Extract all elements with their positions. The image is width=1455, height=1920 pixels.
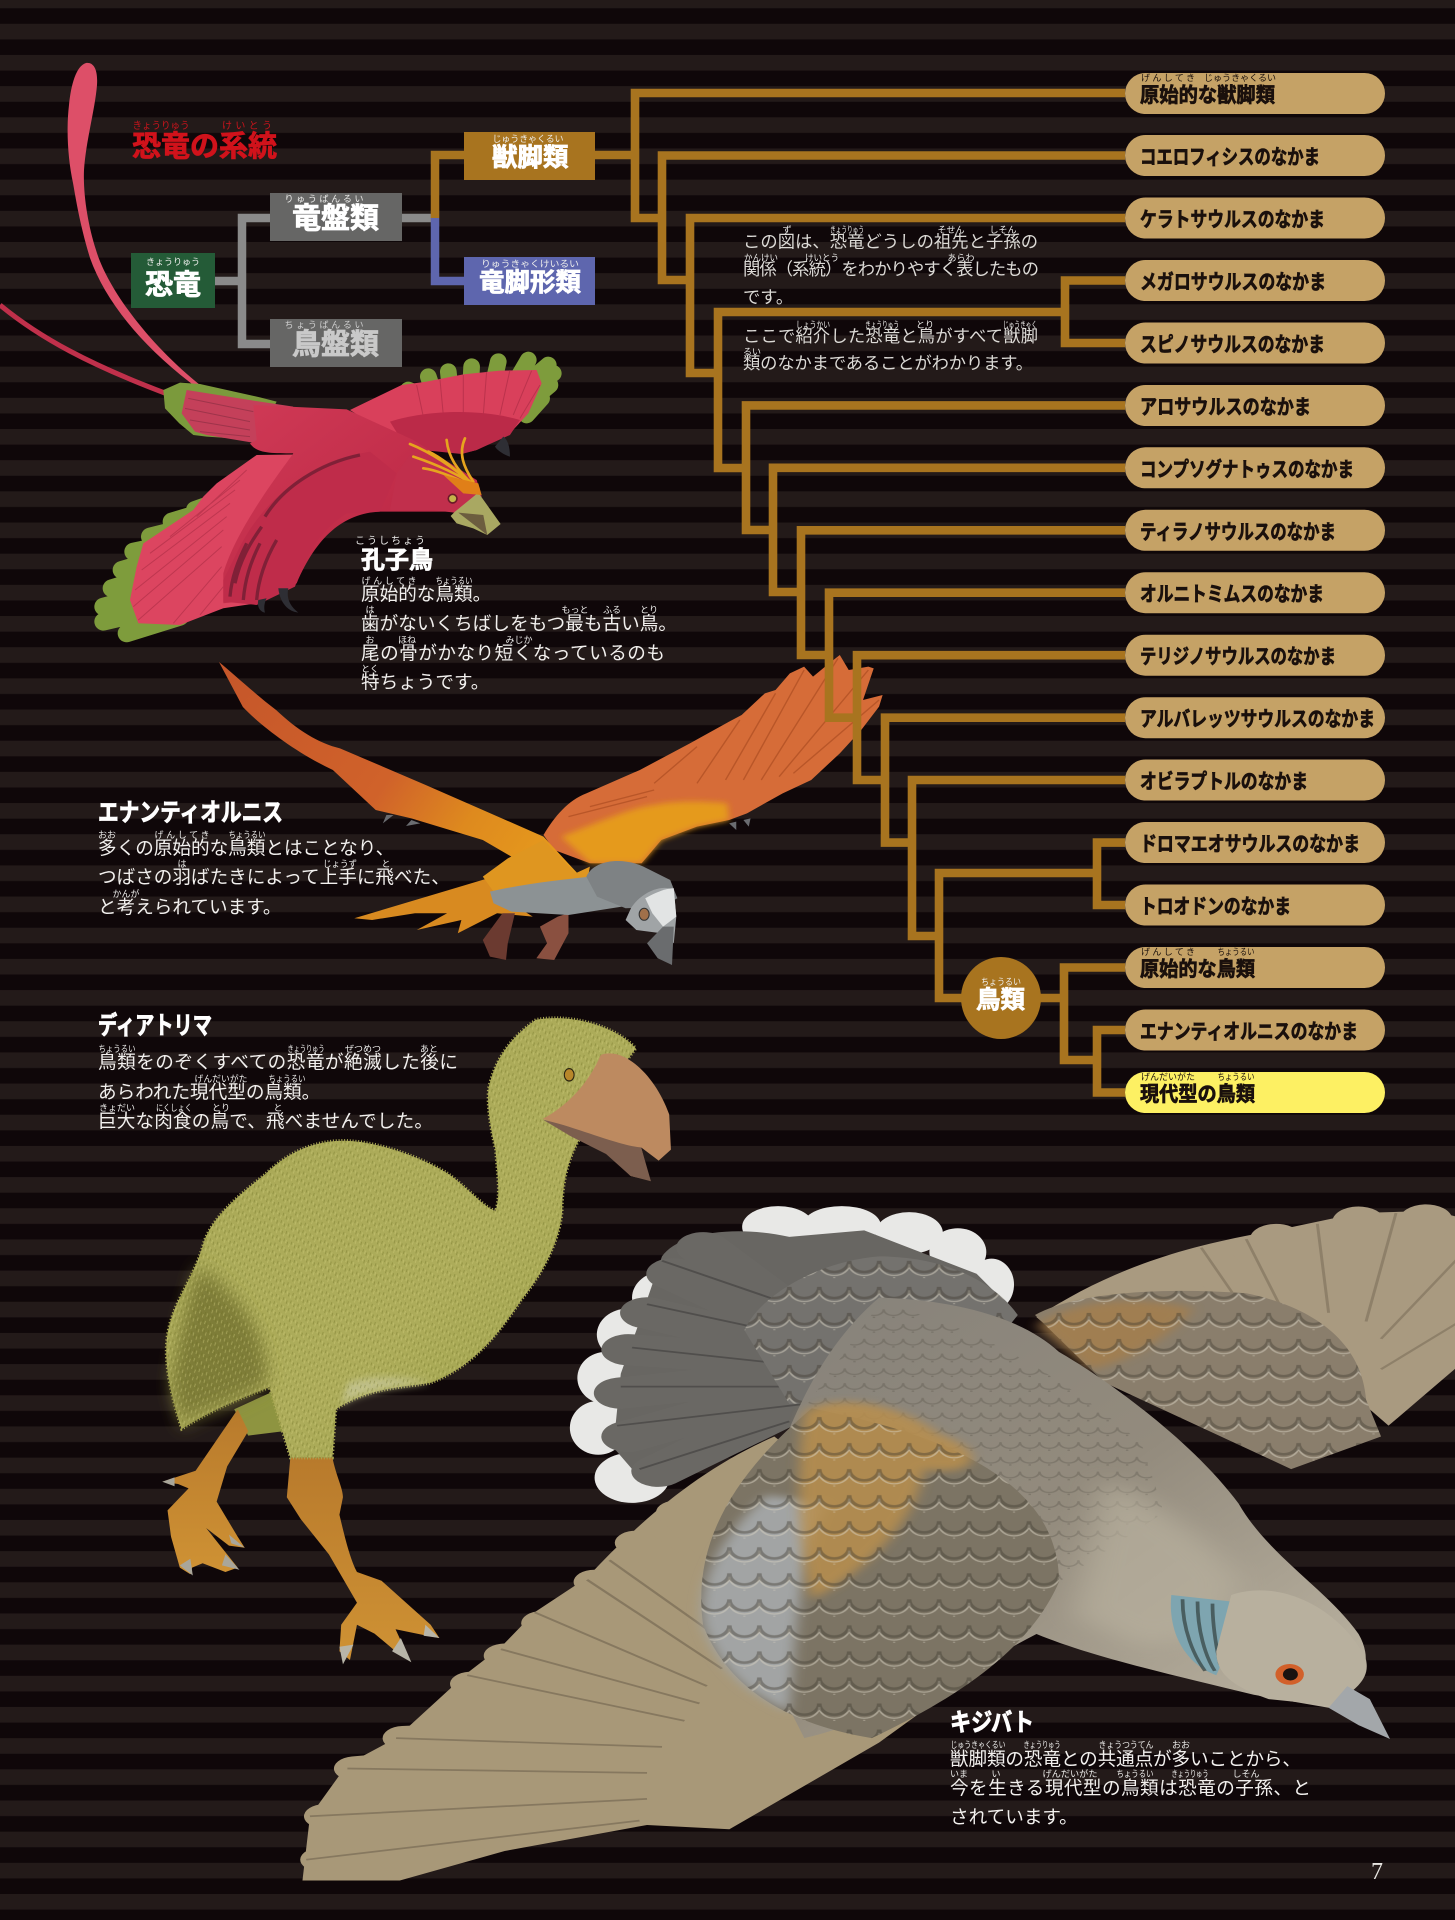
explanation text: るい	[743, 347, 761, 357]
pill: トロオドン: トロオドンのなかま	[1140, 896, 1291, 918]
box: 恐竜	[131, 253, 215, 308]
box: 獣脚類	[464, 132, 595, 180]
caption: ディアトリマ: げんだいがた	[194, 1073, 248, 1084]
caption: キジバト: きょうりゅう	[1172, 1769, 1208, 1779]
pill: アロサウルス: アロサウルスのなかま	[1140, 396, 1311, 419]
box: 鳥盤類: ちょうばんるい	[284, 320, 364, 330]
pill: スピノサウルス	[1125, 322, 1385, 364]
caption: キジバト: 今を生きる現代型の鳥類は恐竜の子孫、と	[950, 1778, 1311, 1798]
caption: エナンティオルニス: エナンティオルニス	[98, 799, 283, 827]
caption: エナンティオルニス: と	[381, 859, 391, 869]
wing claws	[383, 815, 751, 830]
caption: エナンティオルニス: じょうず	[323, 859, 357, 869]
pill: スピノサウルス: スピノサウルスのなかま	[1140, 334, 1325, 356]
illustration: Diatryma bird	[162, 1018, 671, 1664]
illustration: Confuciusornis bird	[0, 63, 553, 633]
caption: エナンティオルニス: つばさの羽ばたきによって上手に飛べた、	[98, 866, 450, 888]
box: 竜脚形類: 竜脚形類	[479, 269, 582, 297]
illustration: Oriental turtle dove	[302, 1206, 1455, 1881]
explanation text: きょうりゅう	[830, 225, 864, 235]
caption: キジバト	[950, 1709, 1311, 1828]
tail grey feathers	[613, 1230, 1018, 1478]
explanation text: そせん	[937, 225, 965, 235]
pill: エナンティオルニス: エナンティオルニスのなかま	[1140, 1020, 1358, 1044]
eye	[448, 494, 457, 503]
caption: キジバト: 獣脚類の恐竜との共通点が多いことから、	[950, 1748, 1301, 1770]
eye	[564, 1069, 574, 1081]
head	[390, 450, 482, 513]
head	[1216, 1590, 1367, 1706]
caption: エナンティオルニス	[98, 799, 450, 918]
pill: 原始的な鳥類: げんしてき	[1141, 947, 1195, 957]
box: 竜盤類	[270, 193, 402, 241]
caption: ディアトリマ: とり	[212, 1103, 230, 1113]
box: 竜盤類: りゅうばんるい	[284, 194, 364, 204]
tail	[163, 383, 277, 440]
caption: ディアトリマ: 鳥類をのぞくすべての恐竜が絶滅した後に	[98, 1052, 458, 1072]
pill: ティラノサウルス	[1125, 510, 1385, 551]
box: 竜盤類: 竜盤類	[292, 202, 379, 235]
near wing green tips	[103, 500, 223, 633]
illustration: Enantiornis bird	[219, 655, 883, 965]
pills: phylogeny groups	[1125, 73, 1385, 1113]
caption: ディアトリマ: ぜつめつ	[345, 1044, 381, 1054]
box: 鳥盤類: 鳥盤類	[292, 328, 379, 361]
caption: エナンティオルニス: 多くの原始的な鳥類とはことなり、	[98, 838, 394, 858]
explanation text: かんけい	[744, 253, 778, 263]
pill: 現代型の鳥類 (highlight): げんだいがた	[1141, 1071, 1195, 1082]
explanation text: とり	[916, 320, 934, 330]
oval node: 鳥類: ちょうるい	[981, 977, 1021, 987]
beak	[1329, 1686, 1390, 1739]
pill: 原始的な獣脚類: じゅうきゃくるい	[1204, 73, 1276, 83]
caption: キジバト: い	[991, 1769, 1001, 1779]
caption: キジバト: きょうつうてん	[1098, 1740, 1154, 1750]
explanation text	[743, 225, 1039, 373]
caption: エナンティオルニス: かんが	[112, 888, 140, 899]
far wing	[350, 370, 542, 453]
pill: 原始的な獣脚類	[1125, 73, 1385, 114]
body	[223, 405, 482, 603]
caption: 孔子鳥	[355, 535, 677, 692]
caption: エナンティオルニス: と考えられています。	[98, 896, 282, 918]
tail white tips	[570, 1206, 1014, 1503]
oval node: 鳥類: 鳥類	[976, 986, 1025, 1014]
caption: キジバト: じゅうきゃくるい	[950, 1740, 1006, 1750]
caption: 孔子鳥: 特ちょうです。	[361, 672, 489, 692]
caption: 孔子鳥: ちょうるい	[436, 576, 472, 586]
far wing coverts	[1035, 1291, 1381, 1469]
pill: コエロフィシス: コエロフィシスのなかま	[1140, 146, 1320, 169]
claws	[258, 437, 510, 613]
near leg	[287, 1458, 439, 1664]
caption: ディアトリマ: と	[273, 1103, 283, 1113]
box: 恐竜: きょうりゅう	[146, 257, 200, 267]
box: 竜脚形類: りゅうきゃくけいるい	[481, 259, 579, 269]
pill: トロオドン	[1125, 884, 1385, 926]
caption: エナンティオルニス: は	[177, 859, 187, 869]
box: 獣脚類: じゅうきゃくるい	[492, 134, 564, 144]
far wing green tips	[408, 360, 553, 415]
pill: 原始的な獣脚類: げんしてき	[1141, 73, 1195, 83]
caption: 孔子鳥: は	[365, 605, 375, 615]
caption: エナンティオルニス: おお	[98, 830, 116, 840]
pill: メガロサウルス: メガロサウルスのなかま	[1140, 271, 1326, 294]
pill: テリジノサウルス	[1125, 635, 1385, 676]
pill: ケラトサウルス	[1125, 198, 1385, 238]
caption: 孔子鳥: もっと	[561, 605, 589, 615]
far wing	[1036, 1211, 1455, 1426]
box: 竜脚形類	[464, 257, 595, 305]
near wing coverts	[701, 1408, 1059, 1738]
explanation text: しょうかい	[796, 320, 830, 330]
head	[626, 888, 676, 943]
caption: ディアトリマ	[98, 1011, 458, 1132]
fur shading	[171, 1272, 268, 1425]
pill: 原始的な鳥類: 原始的な鳥類	[1140, 958, 1255, 981]
caption: キジバト: キジバト	[950, 1709, 1034, 1737]
near wing	[130, 453, 370, 625]
caption: 孔子鳥: 歯がないくちばしをもつ最も古い鳥。	[361, 613, 677, 634]
caption: キジバト: きょうりゅう	[1024, 1740, 1060, 1750]
eye	[1275, 1664, 1304, 1685]
explanation text: ず	[782, 225, 792, 235]
caption: ディアトリマ: 巨大な肉食の鳥で、飛べませんでした。	[98, 1110, 433, 1132]
pill: コエロフィシス	[1125, 135, 1385, 176]
body	[729, 1298, 1366, 1738]
near wing flight feathers	[302, 1437, 1029, 1881]
crest	[410, 438, 478, 488]
caption: 孔子鳥: げんしてき	[362, 576, 416, 586]
caption: ディアトリマ: きょうりゅう	[288, 1044, 324, 1054]
body and neck	[166, 1018, 636, 1458]
caption: 孔子鳥: 尾の骨がかなり短くなっているのも	[361, 642, 665, 664]
caption: ディアトリマ: ちょうるい	[268, 1074, 306, 1084]
oval node: 鳥類	[961, 957, 1041, 1039]
pill: 現代型の鳥類 (highlight): 現代型の鳥類	[1140, 1083, 1255, 1106]
pill: ドロマエオサウルス: ドロマエオサウルスのなかま	[1140, 833, 1360, 856]
pill: コンプソグナトゥス	[1125, 447, 1385, 488]
explanation text: じゅうきゃく	[1003, 320, 1037, 330]
pill: テリジノサウルス: テリジノサウルスのなかま	[1140, 646, 1336, 669]
caption: 孔子鳥: みじか	[505, 635, 533, 645]
eye	[639, 908, 649, 920]
far wing	[543, 655, 883, 863]
pill: オビラプトル	[1125, 760, 1385, 800]
tail streamers	[0, 63, 200, 395]
caption: ディアトリマ: きょだい	[99, 1103, 135, 1113]
pill: アルバレッツサウルス	[1125, 697, 1385, 738]
caption: ディアトリマ: にくしょく	[156, 1103, 192, 1113]
body	[483, 840, 590, 892]
title: けいとう	[222, 120, 272, 132]
neck	[586, 861, 677, 908]
page number: 7	[1371, 1859, 1383, 1885]
caption: エナンティオルニス: ちょうるい	[228, 830, 266, 840]
explanation text: きょうりゅう	[865, 320, 899, 330]
pill: アロサウルス	[1125, 385, 1385, 426]
caption: ディアトリマ: あと	[420, 1044, 438, 1054]
pill: オビラプトル: オビラプトルのなかま	[1140, 770, 1308, 794]
caption: キジバト: おお	[1172, 1740, 1190, 1750]
pill: ドロマエオサウルス	[1125, 822, 1385, 863]
neck patch	[1171, 1595, 1231, 1675]
caption: キジバト: げんだいがた	[1042, 1768, 1098, 1779]
caption: 孔子鳥: お	[365, 635, 375, 645]
pill: ティラノサウルス: ティラノサウルスのなかま	[1140, 521, 1336, 544]
pill: オルニトミムス: オルニトミムスのなかま	[1140, 583, 1324, 606]
explanation text: 関係（系統）をわかりやすく表したもの	[743, 259, 1039, 279]
explanation text: この図は、恐竜どうしの祖先と子孫の	[743, 232, 1038, 252]
explanation text: ここで紹介した恐竜と鳥がすべて獣脚	[743, 326, 1038, 346]
pill: 現代型の鳥類 (highlight)	[1125, 1071, 1385, 1113]
caption: キジバト: いま	[950, 1769, 968, 1779]
phylogeny tree: main branching lines	[635, 93, 1125, 1092]
caption: 孔子鳥: とく	[361, 664, 379, 674]
pill: エナンティオルニス	[1125, 1010, 1385, 1050]
caption: 孔子鳥: ふる	[603, 605, 621, 615]
caption: 孔子鳥: 孔子鳥	[361, 547, 433, 574]
beak	[451, 493, 501, 535]
pill: アルバレッツサウルス: アルバレッツサウルスのなかま	[1140, 708, 1375, 731]
caption: 孔子鳥: こうしちょう	[355, 535, 425, 547]
pill: 原始的な鳥類: ちょうるい	[1218, 947, 1254, 957]
title: 恐竜の系統	[132, 130, 277, 163]
near wing	[219, 662, 577, 877]
far leg	[162, 1392, 283, 1576]
caption: キジバト: ちょうるい	[1116, 1769, 1154, 1779]
box: 鳥盤類	[270, 319, 402, 367]
caption: ディアトリマ: ちょうるい	[98, 1044, 136, 1054]
pill: コンプソグナトゥス: コンプソグナトゥスのなかま	[1140, 457, 1354, 481]
beak	[647, 927, 674, 965]
pill: オルニトミムス	[1125, 572, 1385, 613]
box: 獣脚類: 獣脚類	[492, 144, 569, 172]
caption: 孔子鳥: ほね	[398, 635, 416, 645]
pill: ケラトサウルス: ケラトサウルスのなかま	[1140, 208, 1325, 232]
explanation text: あらわ	[947, 253, 975, 263]
dinosaur mini tree: connectors	[215, 155, 635, 344]
caption: ディアトリマ: あらわれた現代型の鳥類。	[98, 1082, 320, 1102]
pill: 原始的な鳥類	[1125, 947, 1385, 988]
caption: 孔子鳥: とり	[640, 605, 658, 615]
caption: 孔子鳥: 原始的な鳥類。	[361, 584, 491, 604]
explanation text: けいとう	[805, 253, 839, 263]
tail fan	[354, 877, 533, 933]
beak	[543, 1053, 671, 1180]
caption: ディアトリマ: ディアトリマ	[98, 1011, 212, 1040]
caption: キジバト: されています。	[950, 1806, 1078, 1828]
title: きょうりゅう	[132, 120, 190, 132]
caption: エナンティオルニス: げんしてき	[154, 830, 210, 840]
pill: 現代型の鳥類 (highlight): ちょうるい	[1218, 1072, 1254, 1082]
explanation text: 類のなかまであることがわかります。	[743, 353, 1033, 373]
legs	[483, 913, 515, 960]
explanation text: しそん	[989, 225, 1017, 235]
explanation text: です。	[743, 287, 793, 307]
box: 恐竜: 恐竜	[145, 269, 201, 300]
pill: メガロサウルス	[1125, 260, 1385, 301]
pill: 原始的な獣脚類: 原始的な獣脚類	[1140, 84, 1275, 107]
caption: キジバト: しそん	[1232, 1769, 1260, 1779]
